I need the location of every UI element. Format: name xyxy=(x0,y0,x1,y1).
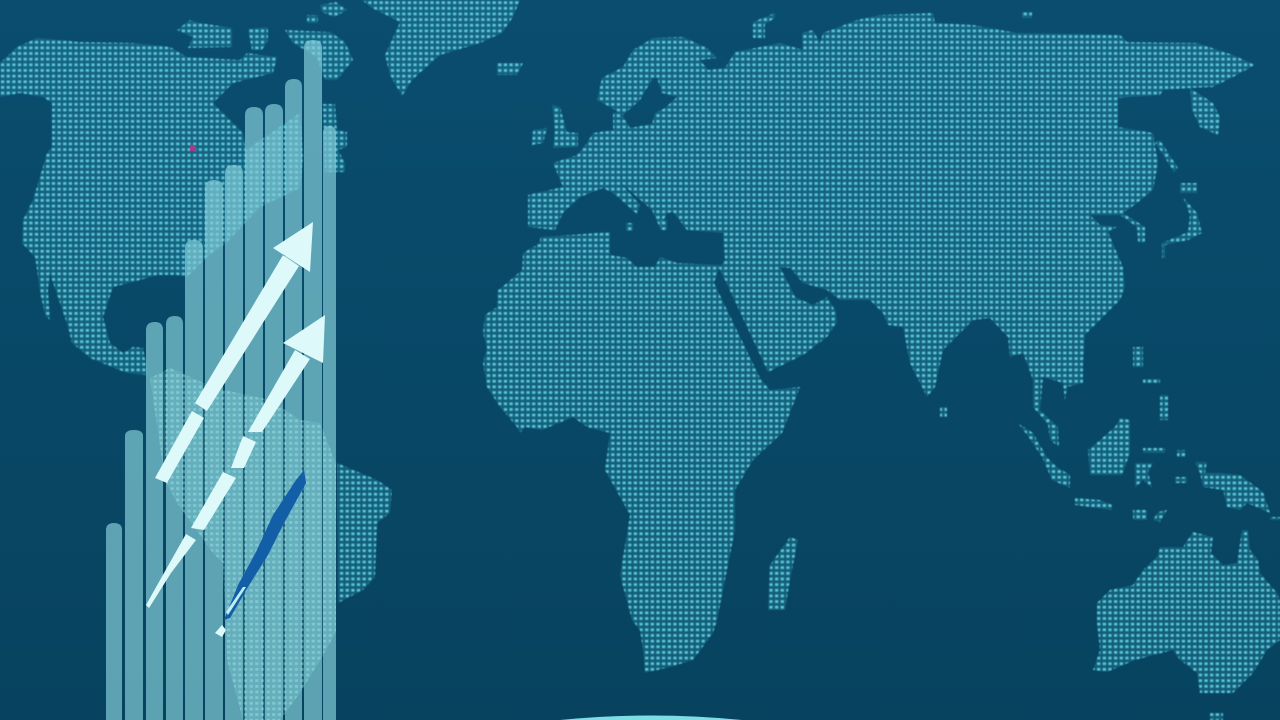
arrow mid section xyxy=(231,436,256,468)
japan xyxy=(1162,183,1202,258)
blue arrow pale streak xyxy=(226,587,246,615)
bar 5 xyxy=(185,240,203,720)
africa xyxy=(483,232,800,673)
bar 9 xyxy=(265,104,283,720)
mediterranean islands xyxy=(626,220,667,231)
sakhalin xyxy=(1155,140,1178,172)
arrow: second white arrow xyxy=(146,315,325,608)
bottom glowing ellipse xyxy=(560,716,742,720)
bar 11 xyxy=(304,40,322,720)
bar 10 xyxy=(285,79,302,720)
madagascar xyxy=(768,537,798,610)
arrow tail xyxy=(155,411,204,483)
sri lanka xyxy=(940,407,947,417)
pink marker xyxy=(190,145,196,151)
arrow shaft xyxy=(195,255,299,411)
bar 2 xyxy=(125,430,143,720)
sumatra xyxy=(1018,423,1070,488)
blue arrow tail xyxy=(215,625,226,637)
bar 7 xyxy=(225,165,243,720)
arrow head xyxy=(283,315,325,363)
bar 1 xyxy=(106,523,122,720)
borneo xyxy=(1088,418,1130,475)
bar 4 xyxy=(166,316,183,720)
eurasia xyxy=(528,13,1255,400)
arrow: first white arrow xyxy=(155,222,313,483)
bar 12 xyxy=(323,126,336,720)
arrow: blue arrow xyxy=(215,470,306,637)
philippines xyxy=(1133,347,1168,420)
united kingdom and ireland xyxy=(532,105,578,148)
new guinea xyxy=(1195,462,1280,520)
arctic islands and eastern canada xyxy=(177,15,353,172)
kamchatka xyxy=(1190,88,1220,135)
arrow lower section xyxy=(191,472,236,530)
greenland xyxy=(320,0,520,96)
south america under bars xyxy=(150,368,336,720)
bar 3 xyxy=(146,322,163,720)
bar 8 xyxy=(245,107,263,720)
south america east xyxy=(337,463,392,603)
blue shaft xyxy=(224,470,306,620)
java xyxy=(1075,498,1112,510)
malay peninsula xyxy=(1033,378,1059,447)
arrow tail xyxy=(146,534,196,608)
arrow head xyxy=(273,222,313,272)
iceland xyxy=(497,63,523,75)
bar 6 xyxy=(205,180,223,720)
tasmania xyxy=(1210,713,1223,720)
bar chart xyxy=(106,40,336,720)
arrow shaft xyxy=(248,350,310,432)
novaya zemlya and arctic siberia xyxy=(753,12,1032,38)
north america xyxy=(0,38,303,375)
sulawesi and eastern islands xyxy=(1133,448,1187,522)
australia xyxy=(1093,530,1280,693)
